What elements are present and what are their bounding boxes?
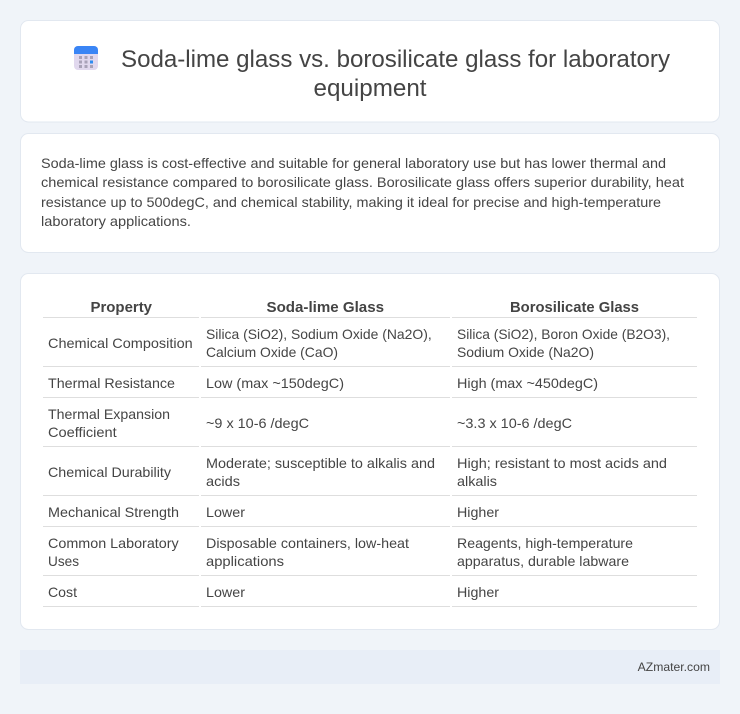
icon: calendar [74, 46, 98, 70]
table header: Soda-lime Glass [266, 299, 384, 316]
text block: summary paragraph: chemical resistance compared to borosilicate glass. Borosilicate glass offers superior durability, heat [41, 174, 684, 190]
footer: AZmater.com [638, 660, 710, 674]
row: chemical durability: acids [206, 473, 240, 489]
row: mechanical strength: Lower [206, 504, 245, 520]
row: cost: Higher [457, 584, 499, 600]
row: chemical composition: Silica (SiO2), Sodium Oxide (Na2O), [206, 326, 432, 342]
row: chemical composition: Calcium Oxide (CaO) [206, 344, 338, 360]
row: cost [48, 584, 499, 600]
table header: Property [90, 299, 153, 316]
table header [90, 299, 639, 316]
row: mechanical strength [48, 504, 499, 520]
row: thermal resistance [48, 375, 598, 391]
row: common laboratory uses: Disposable containers, low-heat [206, 535, 409, 551]
row: chemical durability: Chemical Durability [48, 464, 171, 480]
row: thermal expansion coefficient [48, 406, 572, 440]
row: chemical composition: Silica (SiO2), Boron Oxide (B2O3), [457, 326, 670, 342]
title [121, 46, 670, 102]
table header: Borosilicate Glass [510, 299, 639, 316]
row: cost: Lower [206, 584, 245, 600]
title: equipment [314, 75, 427, 102]
panel: comparison table [20, 274, 720, 630]
row: thermal expansion coefficient: ~3.3 x 10-6 /degC [457, 415, 572, 431]
row: common laboratory uses: apparatus, durable labware [457, 553, 629, 569]
text block: summary paragraph: resistance up to 500degC, and chemical stability, making it ideal for precise and high-temperature [41, 194, 661, 210]
footer [20, 650, 720, 684]
row: common laboratory uses [48, 535, 633, 569]
row: thermal expansion coefficient: Coefficient [48, 424, 117, 440]
row: common laboratory uses: Common Laboratory [48, 535, 179, 551]
row: chemical composition: Sodium Oxide (Na2O) [457, 344, 594, 360]
row: thermal resistance: Thermal Resistance [48, 375, 175, 391]
row: mechanical strength: Higher [457, 504, 499, 520]
row: common laboratory uses: Uses [48, 553, 79, 569]
row: chemical durability: High; resistant to most acids and [457, 455, 667, 471]
title: Soda-lime glass vs. borosilicate glass for laboratory [121, 46, 670, 73]
row: thermal expansion coefficient: ~9 x 10-6 /degC [206, 415, 309, 431]
row: thermal expansion coefficient: Thermal Expansion [48, 406, 170, 422]
row: mechanical strength: Mechanical Strength [48, 504, 179, 520]
row: chemical composition [48, 326, 670, 360]
row: thermal resistance: High (max ~450degC) [457, 375, 598, 391]
text block: summary paragraph: Soda-lime glass is cost-effective and suitable for general laboratory use but has lower thermal and [41, 155, 666, 171]
row: thermal resistance: Low (max ~150degC) [206, 375, 344, 391]
text block: summary paragraph: laboratory applications. [41, 213, 191, 229]
row: common laboratory uses: Reagents, high-temperature [457, 535, 633, 551]
panel: summary [20, 134, 720, 252]
panel: title card [20, 20, 720, 122]
row: common laboratory uses: applications [206, 553, 284, 569]
text block: summary paragraph [41, 155, 684, 229]
row: chemical durability: alkalis [457, 473, 497, 489]
row: chemical durability [48, 455, 667, 489]
row: cost: Cost [48, 584, 77, 600]
row: chemical composition: Chemical Composition [48, 335, 193, 351]
row: chemical durability: Moderate; susceptible to alkalis and [206, 455, 435, 471]
